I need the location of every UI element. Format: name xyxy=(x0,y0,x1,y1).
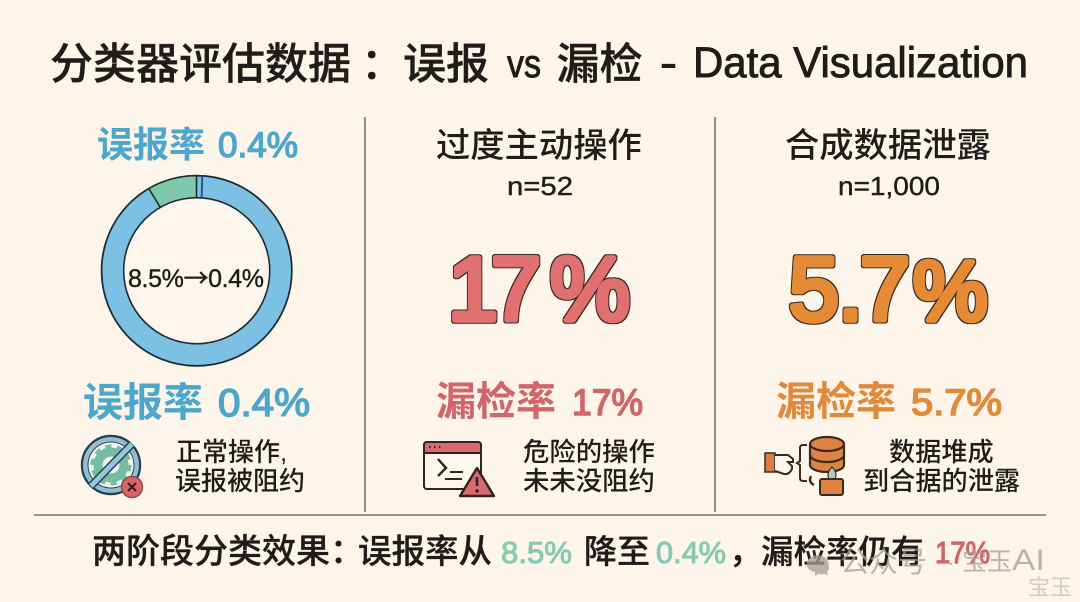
summary line: 8.5% xyxy=(501,535,572,570)
title: 误报 xyxy=(403,41,489,89)
watermark: 公众号 xyxy=(840,547,927,579)
text: icon caption: 正常操作, xyxy=(176,437,287,467)
summary line xyxy=(92,533,990,571)
sample size: n=1,000 xyxy=(838,171,940,201)
text: icon caption: 数据堆成 xyxy=(889,437,994,467)
heading: false positive rate top xyxy=(97,124,298,165)
heading: false positive rate bottom xyxy=(83,381,310,425)
donut chart xyxy=(113,176,281,355)
donut center label: 8.5%→0.4% xyxy=(128,259,264,295)
summary line: 降至 xyxy=(584,533,650,570)
title: 漏检 xyxy=(556,41,642,89)
heading: false positive rate bottom: 误报率 xyxy=(83,381,203,425)
icon: data leak xyxy=(765,437,844,495)
text: icon caption xyxy=(863,437,1020,496)
summary line: ： xyxy=(330,533,364,571)
title xyxy=(50,39,1028,89)
icon: blocked gear xyxy=(82,436,142,498)
heading: false positive rate top: 0.4% xyxy=(218,126,298,165)
summary line: 0.4% xyxy=(656,535,726,570)
big number: 5.7% xyxy=(789,240,988,340)
summary line: ， xyxy=(729,533,763,571)
heading: miss rate xyxy=(776,380,1002,424)
panel: synthetic data leakage xyxy=(765,127,1020,496)
heading: miss rate: 5.7% xyxy=(911,382,1002,423)
panel: overactive operations xyxy=(424,127,655,496)
watermark: 宝玉 xyxy=(962,548,1012,576)
watermark: 宝玉 xyxy=(1028,575,1072,600)
text: icon caption: 误报被阻约 xyxy=(175,466,305,496)
title: - xyxy=(660,40,677,86)
watermark xyxy=(807,544,1072,600)
text: icon caption: 危险的操作 xyxy=(523,437,655,467)
heading: false positive rate top: 误报率 xyxy=(97,124,205,165)
text: icon caption: 未未没阻约 xyxy=(523,466,655,496)
heading: false positive rate bottom: 0.4% xyxy=(218,382,310,425)
heading: miss rate: 漏检率 xyxy=(776,380,896,424)
heading: miss rate: 漏检率 xyxy=(436,380,556,424)
panel: false positive rate xyxy=(82,124,310,498)
summary line: 两阶段分类效果 xyxy=(92,533,330,571)
title: Data Visualization xyxy=(693,39,1028,87)
icon: terminal warning xyxy=(424,442,494,496)
summary line: 误报率从 xyxy=(358,534,492,571)
watermark: · xyxy=(947,550,954,575)
sample size: n=52 xyxy=(507,171,573,201)
heading: 过度主动操作 xyxy=(436,127,642,165)
text: icon caption xyxy=(523,437,655,496)
summary line: 漏检率仍有 xyxy=(761,534,924,570)
heading: 合成数据泄露 xyxy=(785,127,991,165)
watermark: AI xyxy=(1012,544,1045,577)
summary line: 17% xyxy=(935,535,990,570)
big number: 17% xyxy=(448,240,630,340)
text: icon caption: 到合据的泄露 xyxy=(863,466,1020,496)
text: icon caption xyxy=(175,437,305,496)
title: vs xyxy=(507,43,541,86)
title: ： xyxy=(361,41,404,89)
title: 分类器评估数据 xyxy=(50,41,351,89)
heading: miss rate: 17% xyxy=(572,382,643,423)
heading: miss rate xyxy=(436,380,643,424)
